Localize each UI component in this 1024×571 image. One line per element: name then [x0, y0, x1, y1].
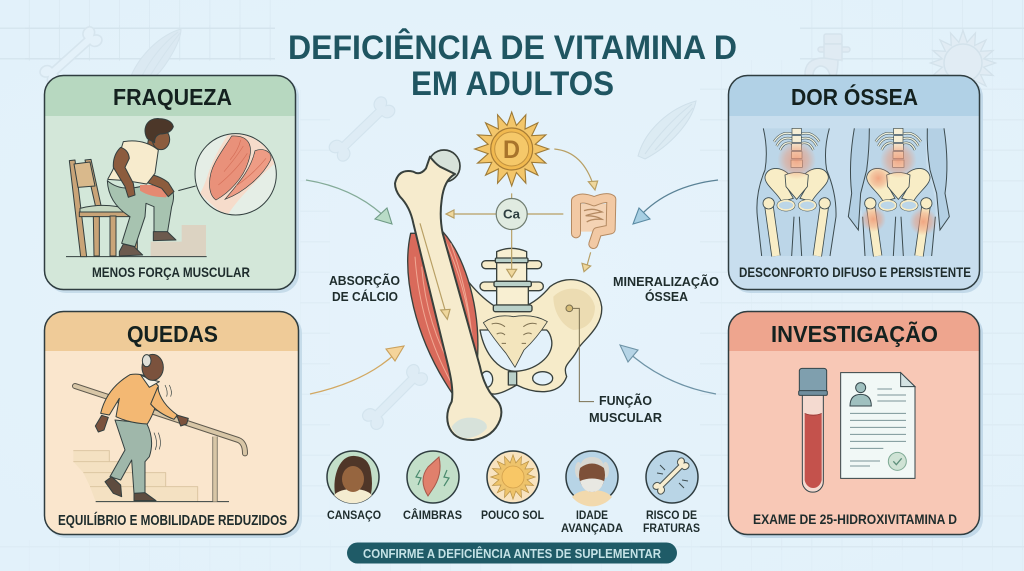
- panel: quedas: [44, 312, 302, 538]
- callout: confirme: [347, 542, 677, 564]
- watermark: center right muscle: [638, 101, 696, 159]
- caption: investigação: EXAME DE 25-HIDROXIVITAMINA D: [753, 511, 957, 527]
- label: função muscular: MUSCULAR: [589, 410, 663, 425]
- label: D: D: [503, 136, 520, 164]
- arrow: quedas to centre: [310, 346, 404, 394]
- watermark: top right spine: [805, 34, 850, 76]
- label: idade avançada: IDADE: [576, 508, 608, 522]
- magnified muscle fibres: [200, 134, 274, 214]
- icon: pouco sol: [487, 451, 539, 503]
- heading: quedas: QUEDAS: [127, 321, 218, 347]
- icon: câimbras: [407, 451, 459, 503]
- heading: investigação: INVESTIGAÇÃO: [771, 320, 938, 347]
- label: função muscular: FUNÇÃO: [599, 393, 652, 408]
- femur: [395, 157, 501, 440]
- leader: função muscular: [566, 305, 594, 402]
- heading: fraqueza: FRAQUEZA: [113, 84, 232, 110]
- icon: idade avançada: [566, 451, 618, 506]
- watermark: top left muscle: [131, 29, 181, 76]
- label: idade avançada: AVANÇADA: [561, 521, 623, 535]
- calcium node: [496, 198, 527, 230]
- label: absorção de cálcio: DE CÁLCIO: [332, 289, 398, 304]
- pelvis: [467, 280, 602, 394]
- label: Ca: Ca: [503, 208, 521, 222]
- arrow: dor óssea to centre: [633, 180, 718, 224]
- illustration: man on stairs: [73, 354, 245, 502]
- label: pouco sol: POUCO SOL: [481, 508, 544, 522]
- femur condyle: [452, 418, 487, 438]
- arrow: investigação to centre: [620, 345, 716, 394]
- icon: vitamin D sun: [475, 112, 549, 186]
- watermark: top right sun: [930, 30, 996, 96]
- caption: dor óssea: DESCONFORTO DIFUSO E PERSISTENTE: [739, 264, 971, 280]
- label: risco de fraturas: RISCO DE: [646, 508, 697, 522]
- caption: quedas: EQUILÍBRIO E MOBILIDADE REDUZIDOS: [58, 512, 287, 529]
- watermark: bottom center bone: [360, 362, 430, 432]
- label: risco de fraturas: [643, 508, 700, 535]
- figure left: [757, 128, 836, 256]
- label: câimbras: CÂIMBRAS: [403, 507, 462, 522]
- icon: blood tube: [799, 368, 827, 492]
- title: EM ADULTOS: [411, 65, 614, 103]
- figure right: [848, 128, 949, 256]
- gut icon: [576, 198, 611, 244]
- femur head: [428, 150, 460, 182]
- illustration: skeleton figures with pain zones: [757, 128, 949, 256]
- muscle: [408, 228, 478, 395]
- title: [288, 29, 737, 103]
- panel: dor óssea: [728, 76, 983, 293]
- anatomy: pelvis, spine and femur: [395, 150, 602, 440]
- caption: fraqueza: MENOS FORÇA MUSCULAR: [92, 264, 250, 280]
- icon: cansaço: [327, 451, 379, 503]
- arrow: fraqueza to centre: [306, 180, 392, 224]
- icon: risco de fraturas: [646, 451, 698, 503]
- label: mineralização óssea: [613, 274, 719, 304]
- watermark: top left bone: [38, 25, 104, 87]
- label: mineralização óssea: ÓSSEA: [645, 289, 689, 304]
- panel: investigação: [728, 312, 983, 538]
- label: absorção de cálcio: [329, 273, 400, 304]
- panel: fraqueza: [44, 76, 299, 293]
- label: risco de fraturas: FRATURAS: [643, 521, 700, 535]
- heading: dor óssea: DOR ÓSSEA: [791, 83, 918, 110]
- lumbar vertebrae: [480, 248, 543, 312]
- watermark: center left bone: [327, 94, 397, 164]
- title: DEFICIÊNCIA DE VITAMINA D: [288, 29, 737, 67]
- callout: confirme: CONFIRME A DEFICIÊNCIA ANTES DE SUPLEMENTAR: [363, 546, 661, 561]
- label: absorção de cálcio: ABSORÇÃO: [329, 273, 400, 288]
- magnifier: muscle detail: [195, 134, 276, 215]
- label: função muscular: [589, 393, 663, 425]
- label: cansaço: CANSAÇO: [327, 508, 381, 522]
- pathway arrows: [420, 149, 598, 319]
- label: idade avançada: [561, 508, 623, 535]
- icon: lab report: [841, 373, 915, 478]
- icon row: risk factors: [327, 451, 700, 535]
- label: mineralização óssea: MINERALIZAÇÃO: [613, 274, 719, 289]
- illustration: person rising from chair: [66, 119, 276, 257]
